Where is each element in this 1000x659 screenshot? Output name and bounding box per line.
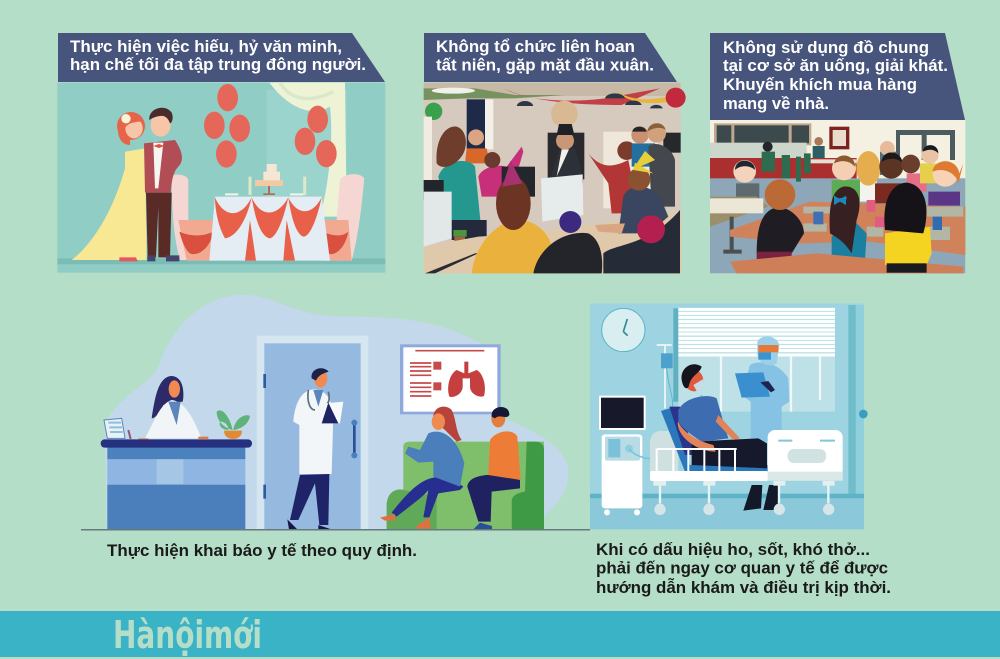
woman bbox=[392, 477, 463, 517]
nurse bbox=[742, 363, 789, 442]
banner: office party: Không tổ chức liên hoan bbox=[436, 37, 635, 56]
caption: hospital advice bbox=[596, 540, 891, 597]
illustration: clinic reception bbox=[101, 295, 568, 530]
illustration: wedding scene bbox=[57, 83, 385, 273]
caption: hospital advice: hướng dẫn khám và điều trị kịp thời. bbox=[596, 578, 891, 597]
man bbox=[467, 475, 520, 522]
banner: canteen: mang về nhà. bbox=[723, 94, 829, 113]
banner: canteen bbox=[710, 33, 965, 120]
iv drip bbox=[657, 345, 672, 408]
sofa bbox=[387, 442, 544, 529]
illustration: canteen bbox=[710, 120, 965, 273]
banner: wedding bbox=[58, 33, 385, 82]
banner: wedding: Thực hiện việc hiếu, hỷ văn minh, bbox=[70, 37, 342, 56]
groom bbox=[146, 193, 172, 257]
panel: canteen bbox=[710, 33, 965, 273]
caption: hospital advice: Khi có dấu hiệu ho, sốt, khó thở... bbox=[596, 540, 870, 559]
icon: lungs bbox=[448, 362, 485, 397]
panel: office party bbox=[424, 33, 686, 273]
panel: medical declaration bbox=[81, 295, 590, 560]
illustration: office party bbox=[424, 83, 686, 273]
desk bbox=[107, 447, 245, 459]
banner: canteen: Không sử dụng đồ chung bbox=[723, 38, 929, 57]
poster bbox=[400, 344, 501, 414]
footer bar bbox=[0, 611, 1000, 657]
panel: hospital bbox=[590, 303, 891, 597]
ventilator bbox=[599, 396, 646, 430]
banner: wedding: hạn chế tối đa tập trung đông người. bbox=[70, 55, 366, 74]
illustration: hospital room bbox=[590, 303, 868, 529]
ground line bbox=[81, 529, 590, 530]
receptionist bbox=[152, 376, 183, 418]
banner: canteen: tại cơ sở ăn uống, giải khát. bbox=[723, 56, 948, 75]
plant bbox=[224, 431, 242, 439]
caption: medical declaration: Thực hiện khai báo y tế theo quy định. bbox=[107, 541, 417, 560]
caption: hospital advice: phải đến ngay cơ quan y tế để được bbox=[596, 558, 888, 578]
bride bbox=[72, 148, 147, 260]
bed bbox=[650, 431, 678, 472]
banner: office party: tất niên, gặp mặt đầu xuân. bbox=[436, 56, 654, 74]
patient bbox=[692, 438, 767, 468]
banner: canteen: Khuyến khích mua hàng bbox=[723, 75, 917, 94]
banner: office party bbox=[424, 33, 677, 82]
panel: wedding bbox=[57, 33, 385, 273]
guests bbox=[465, 148, 490, 163]
logo: Hànộimới bbox=[113, 613, 262, 657]
doctor bbox=[290, 474, 329, 525]
